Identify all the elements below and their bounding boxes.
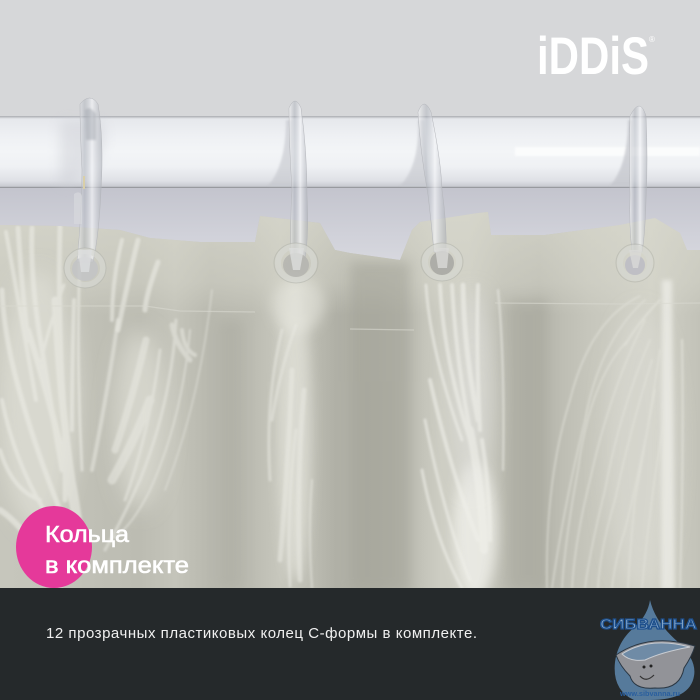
bottom dark band	[0, 588, 700, 700]
feather pattern middle right	[422, 285, 503, 588]
feather pattern middle left	[92, 290, 312, 588]
ring 3 and grommet	[418, 104, 463, 281]
feather pattern left	[0, 226, 158, 590]
logo: Sibvanna: СИБВАННА	[600, 616, 697, 633]
description text: 12 прозрачных пластиковых колец С-формы в комплекте.	[46, 625, 477, 642]
logo: iDDiS: iDDiS	[537, 27, 649, 86]
ring 2 and grommet	[274, 101, 318, 283]
fabric folds and sheen	[0, 262, 675, 600]
curtain rod	[0, 116, 700, 188]
hem stitching	[0, 303, 700, 330]
badge: pink circle with heading: Кольца	[45, 521, 130, 547]
logo: iDDiS: ®	[649, 35, 655, 44]
curtain fabric	[0, 205, 700, 600]
wall background	[0, 0, 700, 266]
logo: Sibvanna: www.sibvanna.ru	[619, 691, 680, 698]
badge: pink circle with heading: в комплекте	[45, 552, 189, 578]
ring 1 and grommet	[64, 98, 106, 288]
ring 4 and grommet	[616, 106, 654, 282]
logo: Sibvanna	[600, 600, 697, 700]
feather pattern right	[547, 296, 683, 588]
badge: pink circle with heading	[16, 506, 189, 588]
